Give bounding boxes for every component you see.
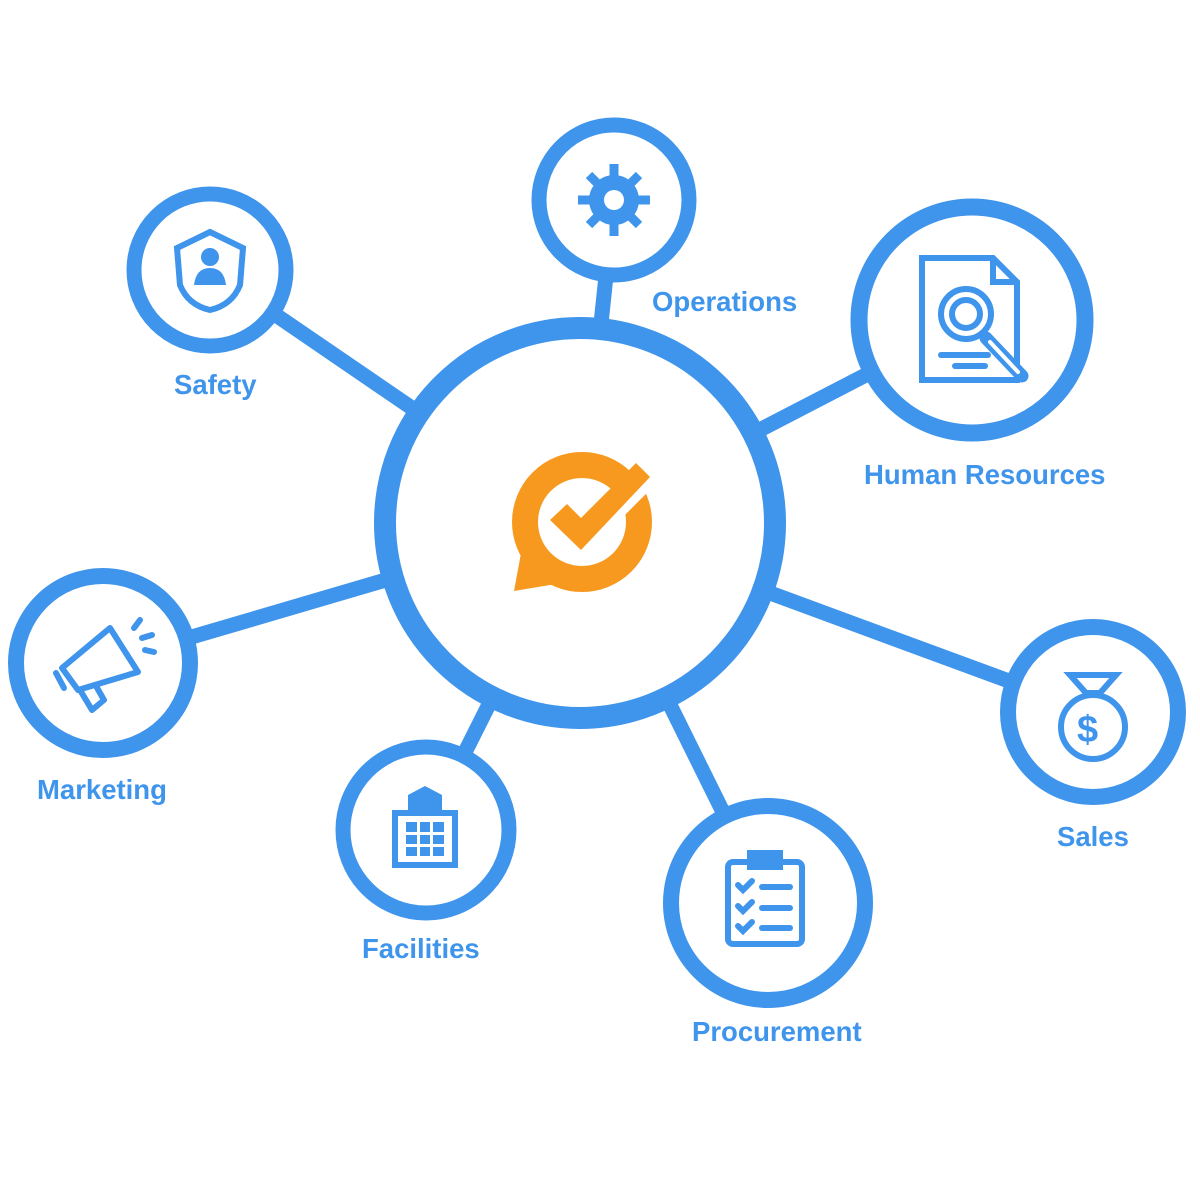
node: Human Resources	[859, 207, 1105, 490]
icon: clipboard	[728, 853, 802, 944]
icon: money bag	[1061, 675, 1125, 759]
icon: shield	[177, 232, 243, 310]
node: Procurement	[671, 806, 865, 1047]
node: Sales	[1008, 627, 1178, 852]
node: Safety	[134, 194, 286, 400]
connectors	[103, 200, 1093, 903]
logo	[514, 463, 665, 591]
node: Procurement: Procurement	[692, 1016, 862, 1047]
node: Operations	[539, 125, 797, 317]
node: Human Resources: Human Resources	[864, 459, 1105, 490]
node: Safety: Safety	[174, 369, 257, 400]
icon: gear	[578, 164, 650, 236]
node: Sales: $	[1077, 709, 1098, 751]
icon: megaphone	[56, 620, 154, 710]
icon: building	[392, 786, 458, 868]
icon: document search	[922, 258, 1022, 380]
central hub	[385, 328, 775, 718]
node: Facilities: Facilities	[362, 933, 480, 964]
node: Operations: Operations	[652, 286, 797, 317]
node: Sales: Sales	[1057, 821, 1129, 852]
node: Facilities	[343, 747, 509, 964]
node: Marketing	[16, 576, 190, 805]
node: Marketing: Marketing	[37, 774, 167, 805]
